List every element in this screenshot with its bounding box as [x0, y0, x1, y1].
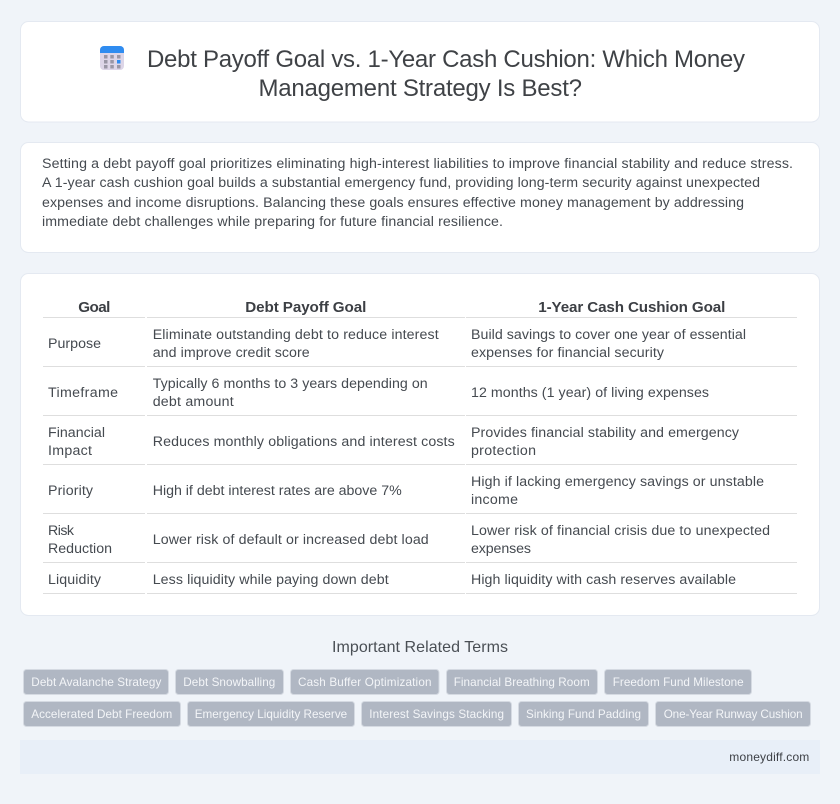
row: priority: income — [471, 492, 518, 508]
footer bar — [20, 740, 820, 774]
row: financial impact: protection — [471, 443, 536, 459]
tag: accelerated debt freedom: Accelerated Debt Freedom — [31, 708, 172, 721]
tag: one-year runway cushion: One-Year Runway Cushion — [664, 708, 803, 721]
row: priority: High if debt interest rates are above 7% — [153, 483, 402, 499]
row: liquidity: High liquidity with cash reserves available — [471, 572, 736, 588]
intro text — [42, 156, 793, 230]
tag: sinking fund padding — [518, 702, 648, 726]
tag: one-year runway cushion — [656, 702, 810, 726]
tag: cash buffer optimization — [290, 670, 439, 694]
intro text: A 1-year cash cushion goal builds a substantial emergency fund, providing long-term security against unexpected — [42, 175, 760, 191]
tag: cash buffer optimization: Cash Buffer Optimization — [298, 676, 432, 689]
row: liquidity — [43, 572, 797, 594]
row: liquidity: Liquidity — [48, 572, 102, 588]
tag: freedom fund milestone: Freedom Fund Milestone — [613, 676, 744, 689]
table header row: Goal — [78, 299, 110, 316]
row: liquidity: Less liquidity while paying down debt — [153, 572, 389, 588]
row: timeframe: debt amount — [153, 394, 234, 410]
title — [147, 46, 745, 102]
row: financial impact: Provides financial stability and emergency — [471, 425, 740, 441]
related term tags — [24, 670, 810, 726]
row: timeframe: Timeframe — [48, 385, 118, 401]
panel: comparison table — [20, 274, 820, 616]
row: purpose — [43, 327, 797, 367]
row: purpose: and improve credit score — [153, 345, 310, 361]
tag: debt snowballing: Debt Snowballing — [183, 676, 275, 689]
intro text: immediate debt challenges while preparing for future financial resilience. — [42, 214, 503, 230]
tag: debt avalanche strategy — [24, 670, 168, 694]
tag: financial breathing room: Financial Breathing Room — [454, 676, 590, 689]
row: risk reduction: Lower risk of default or increased debt load — [153, 532, 429, 548]
row: purpose: expenses for financial security — [471, 345, 665, 361]
row: timeframe: 12 months (1 year) of living expenses — [471, 385, 709, 401]
panel: intro paragraph — [20, 142, 820, 252]
row: priority: Priority — [48, 483, 94, 499]
tag: emergency liquidity reserve: Emergency Liquidity Reserve — [195, 708, 347, 721]
table header row — [43, 299, 797, 318]
row: purpose: Eliminate outstanding debt to reduce interest — [153, 327, 439, 343]
row: financial impact: Impact — [48, 443, 92, 459]
tag: debt avalanche strategy: Debt Avalanche Strategy — [31, 676, 161, 689]
row: timeframe — [43, 376, 797, 416]
heading: related terms: Important Related Terms — [332, 639, 508, 656]
row: financial impact: Reduces monthly obligations and interest costs — [153, 434, 455, 450]
tag: financial breathing room — [446, 670, 598, 694]
tag: emergency liquidity reserve — [188, 702, 354, 726]
title: Management Strategy Is Best? — [258, 75, 582, 102]
tag: interest savings stacking — [362, 702, 512, 726]
row: risk reduction — [43, 523, 797, 563]
row: financial impact — [43, 425, 797, 465]
row: priority: High if lacking emergency savings or unstable — [471, 474, 764, 490]
header panel — [20, 22, 820, 122]
tag: freedom fund milestone — [604, 670, 752, 694]
row: purpose: Build savings to cover one year of essential — [471, 327, 746, 343]
row: risk reduction: expenses — [471, 541, 531, 557]
row: purpose: Purpose — [48, 336, 101, 352]
row: timeframe: Typically 6 months to 3 years depending on — [153, 376, 428, 392]
row: risk reduction: Risk — [48, 523, 75, 539]
row: financial impact: Financial — [48, 425, 105, 441]
table header row: 1-Year Cash Cushion Goal — [538, 299, 725, 316]
row: priority — [43, 474, 797, 514]
intro text: Setting a debt payoff goal prioritizes eliminating high-interest liabilities to improve financial stability and reduce stress. — [42, 156, 793, 172]
intro text: expenses and income disruptions. Balancing these goals ensures effective money management by addressing — [42, 195, 744, 211]
row: risk reduction: Reduction — [48, 541, 112, 557]
title: Debt Payoff Goal vs. 1-Year Cash Cushion: Which Money — [147, 46, 745, 73]
icon: calendar — [100, 46, 124, 70]
tag: debt snowballing — [176, 670, 284, 694]
tag: accelerated debt freedom — [24, 702, 180, 726]
row: risk reduction: Lower risk of financial crisis due to unexpected — [471, 523, 770, 539]
table header row: Debt Payoff Goal — [245, 299, 366, 316]
tag: interest savings stacking: Interest Savings Stacking — [369, 708, 504, 721]
tag: sinking fund padding: Sinking Fund Padding — [526, 708, 641, 721]
footer bar: moneydiff.com — [729, 750, 809, 764]
